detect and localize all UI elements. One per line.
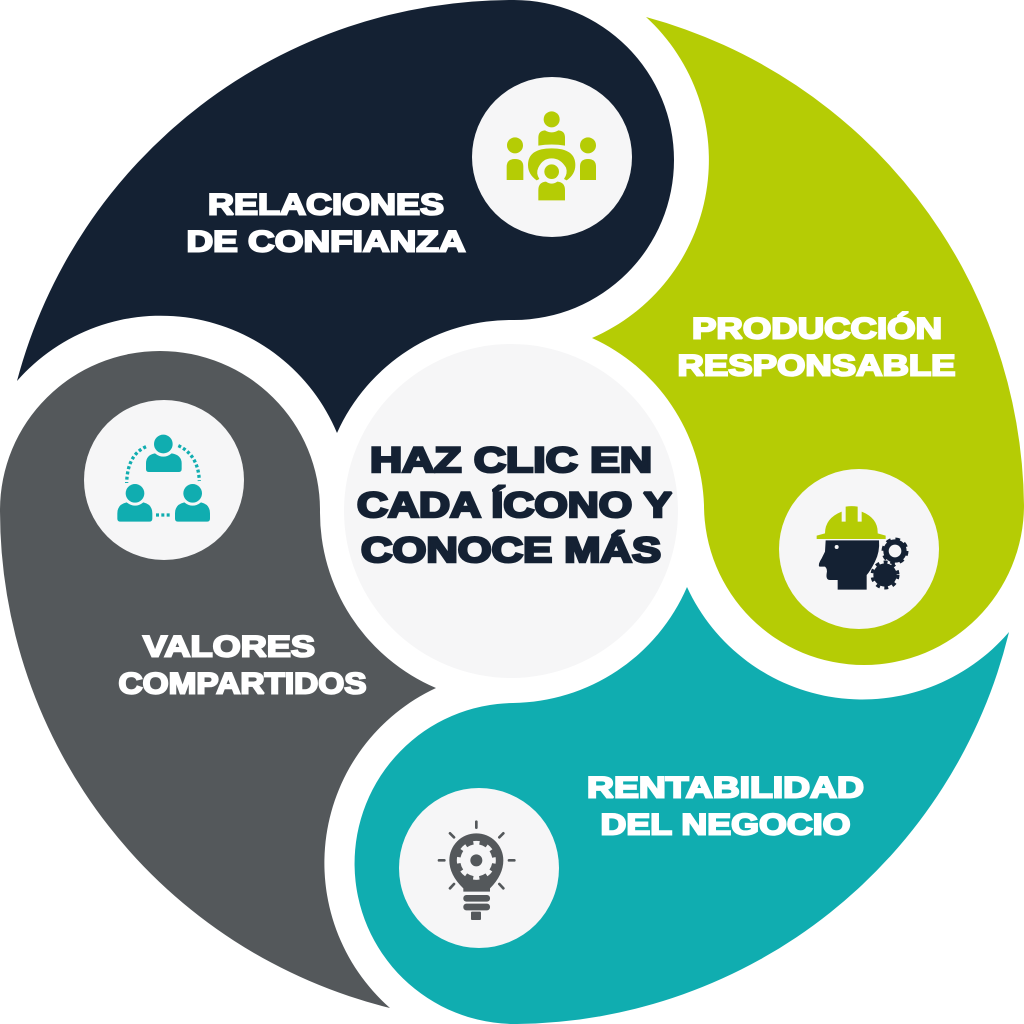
icon: light bulb with gear (399, 788, 559, 948)
panel: rentabilidad del negocio (355, 587, 1009, 1024)
label: producción responsable: RESPONSABLE (678, 350, 956, 382)
label: relaciones de confianza (186, 188, 466, 258)
label: valores compartidos: VALORES (143, 630, 315, 664)
label: valores compartidos: COMPARTIDOS (118, 668, 366, 700)
panel: relaciones de confianza (17, 0, 674, 433)
label: relaciones de confianza: DE CONFIANZA (186, 226, 466, 258)
heading: haz clic en cada ícono y conoce más: CADA ÍCONO Y (357, 485, 672, 525)
icon: people meeting (472, 77, 632, 237)
heading: haz clic en cada ícono y conoce más: CONOCE MÁS (361, 530, 661, 570)
segment: lime (592, 17, 1024, 665)
heading: haz clic en cada ícono y conoce más (357, 440, 672, 570)
segment: teal (355, 587, 1009, 1024)
label: relaciones de confianza: RELACIONES (208, 188, 444, 222)
label: valores compartidos (118, 630, 366, 700)
segment: navy (17, 0, 674, 433)
icon: worker head with gears (779, 469, 939, 629)
segment: grey (0, 351, 436, 1008)
center circle (344, 344, 678, 678)
icon: connected team (84, 400, 244, 560)
label: rentabilidad del negocio: DEL NEGOCIO (600, 808, 850, 842)
panel: center call to action (344, 344, 678, 678)
panel: producción responsable (592, 17, 1024, 665)
label: rentabilidad del negocio: RENTABILIDAD (587, 772, 864, 804)
label: rentabilidad del negocio (587, 772, 864, 842)
panel: valores compartidos (0, 351, 436, 1008)
label: producción responsable: PRODUCCIÓN (692, 312, 942, 346)
heading: haz clic en cada ícono y conoce más: HAZ CLIC EN (370, 440, 652, 480)
label: producción responsable (678, 312, 956, 382)
